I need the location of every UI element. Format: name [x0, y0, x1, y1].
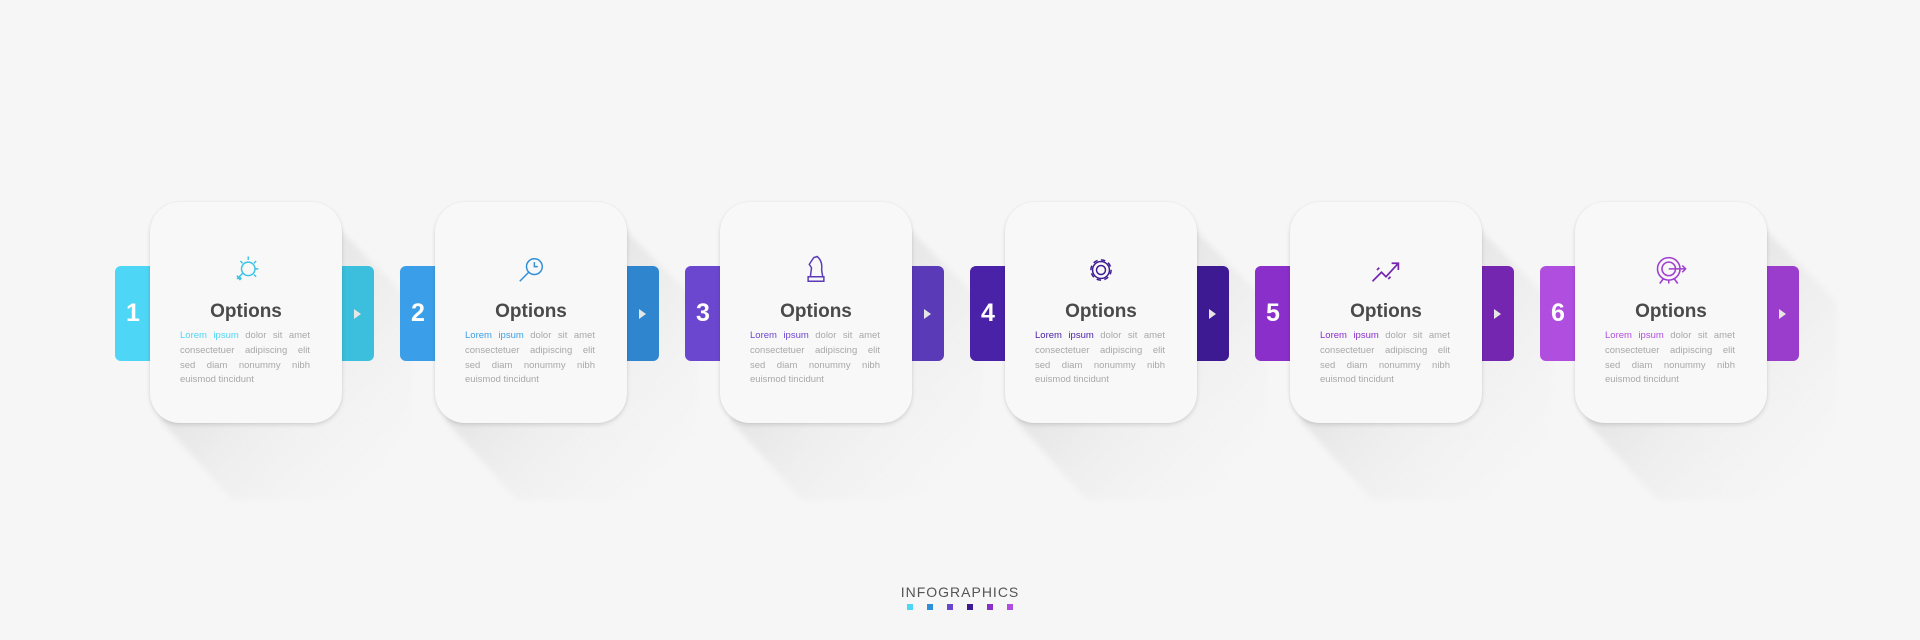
icon: trend	[1372, 262, 1400, 282]
arrow tab 4	[1187, 266, 1229, 361]
heading: Options	[1350, 301, 1422, 322]
text: Lorem ipsum dolor sit amet consectetuer adipiscing elit sed diam nonummy nibh euismod tincidunt	[1320, 330, 1450, 385]
text: Lorem ipsum dolor sit amet consectetuer adipiscing elit sed diam nonummy nibh euismod tincidunt	[465, 330, 595, 385]
step 3	[685, 202, 950, 468]
heading: Options	[495, 301, 567, 322]
left tab 4	[970, 266, 1015, 361]
text: Lorem ipsum dolor sit amet consectetuer adipiscing elit sed diam nonummy nibh euismod tincidunt	[180, 330, 310, 385]
left tab 5	[1255, 266, 1300, 361]
card 2	[435, 202, 627, 423]
icon: gear	[1090, 259, 1112, 281]
arrow tab 6	[1757, 266, 1799, 361]
card 5	[1290, 202, 1482, 423]
left tab 1	[115, 266, 160, 361]
step 6	[1540, 202, 1806, 468]
icon: search	[519, 258, 543, 282]
footer color squares	[907, 604, 1013, 610]
heading: Options	[210, 301, 282, 322]
left tab 2	[400, 266, 445, 361]
left tab 1: 1	[126, 299, 140, 327]
card 3	[720, 202, 912, 423]
footer: INFOGRAPHICS label: INFOGRAPHICS	[901, 584, 1019, 600]
footer: INFOGRAPHICS label	[901, 584, 1019, 610]
card 6	[1575, 202, 1767, 423]
step 4	[970, 202, 1236, 468]
arrow tab 2	[617, 266, 659, 361]
left tab 3	[685, 266, 730, 361]
heading: Options	[1065, 301, 1137, 322]
left tab 6: 6	[1551, 299, 1565, 327]
icon: bulb	[236, 256, 258, 281]
arrow tab 3	[902, 266, 944, 361]
arrow tab 1	[332, 266, 374, 361]
arrow tab 5	[1472, 266, 1514, 361]
heading: Options	[780, 301, 852, 322]
heading: Options	[1635, 301, 1707, 322]
text: Lorem ipsum dolor sit amet consectetuer adipiscing elit sed diam nonummy nibh euismod tincidunt	[1605, 330, 1735, 385]
step 1	[115, 202, 380, 468]
left tab 4: 4	[981, 299, 995, 327]
left tab 6	[1540, 266, 1585, 361]
text: Lorem ipsum dolor sit amet consectetuer adipiscing elit sed diam nonummy nibh euismod tincidunt	[1035, 330, 1165, 385]
icon: chess knight	[807, 256, 825, 282]
left tab 2: 2	[411, 299, 425, 327]
left tab 3: 3	[696, 299, 710, 327]
left tab 5: 5	[1266, 299, 1280, 327]
step 2	[400, 202, 666, 468]
step 5	[1255, 202, 1520, 468]
card 1	[150, 202, 342, 423]
icon: target	[1656, 256, 1687, 284]
card 4	[1005, 202, 1197, 423]
text: Lorem ipsum dolor sit amet consectetuer adipiscing elit sed diam nonummy nibh euismod tincidunt	[750, 330, 880, 385]
